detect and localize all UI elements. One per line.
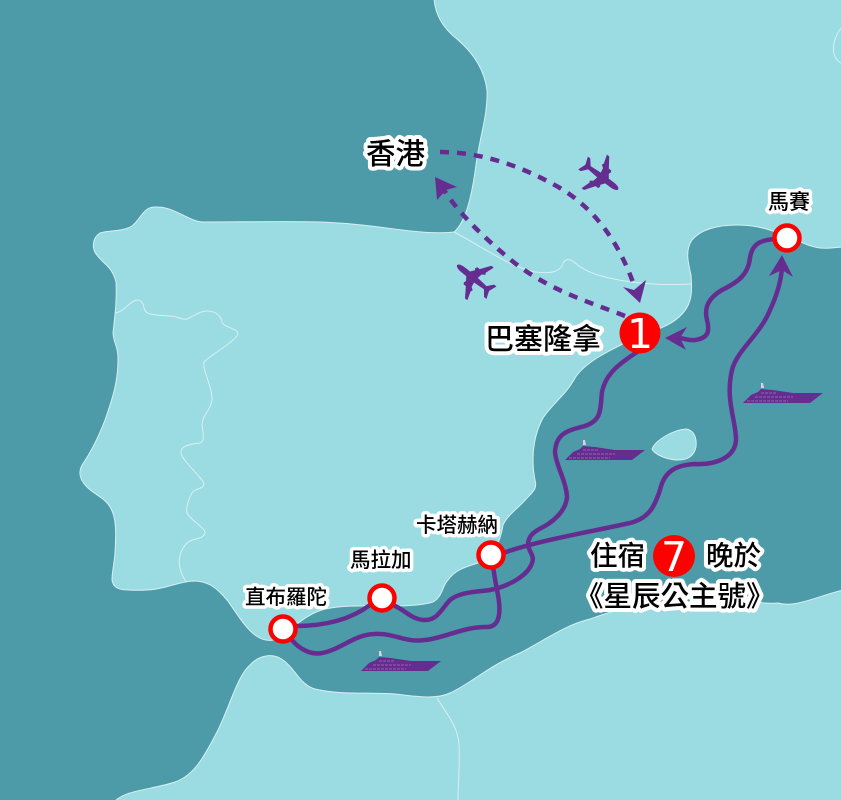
label: Hong Kong: 香港 xyxy=(366,138,426,171)
stop marker: Gibraltar xyxy=(270,616,296,642)
arrowhead: Barcelona arrival xyxy=(623,280,646,303)
border: Spain and France xyxy=(454,232,692,285)
land: North Africa xyxy=(114,590,841,800)
cruise route: Marseille to Barcelona xyxy=(678,239,775,340)
arrowhead: Hong Kong arrival xyxy=(435,177,457,200)
badge: 7 xyxy=(653,533,695,581)
flight path: Barcelona to Hong Kong xyxy=(435,177,625,316)
stop marker: Cartagena xyxy=(478,542,504,568)
icon: cruise ship south xyxy=(361,651,441,671)
label: Gibraltar: 直布羅陀 xyxy=(245,586,327,609)
arrowhead: Marseille arrival xyxy=(769,255,793,277)
label: Cartagena: 卡塔赫納 xyxy=(416,514,498,537)
border: Morocco and Algeria xyxy=(437,698,459,800)
callout text: ship name: 《星辰公主號》 xyxy=(575,581,775,613)
island: Mallorca xyxy=(652,429,696,460)
label: Malaga: 馬拉加 xyxy=(350,549,412,572)
icon: plane eastbound xyxy=(570,146,631,206)
cruise route: Malaga to Gibraltar xyxy=(295,605,370,626)
icon: cruise ship central xyxy=(565,440,645,460)
label: Marseille: 馬賽 xyxy=(768,191,810,214)
callout text: stay: 住宿 xyxy=(590,540,645,571)
badge: 7: 7 xyxy=(661,533,687,581)
badge: 1 xyxy=(620,310,660,358)
label: Barcelona: 巴塞隆拿 xyxy=(485,323,601,356)
icon: plane westbound xyxy=(444,249,505,309)
flight path: Hong Kong to Barcelona xyxy=(440,152,646,303)
arrowhead: Barcelona return xyxy=(665,327,687,350)
callout text: nights on: 晚於 xyxy=(706,540,761,571)
cruise route: Gibraltar to Cartagena xyxy=(292,565,499,653)
callout: seven nights aboard xyxy=(575,533,775,613)
stop marker: Marseille xyxy=(774,226,800,250)
land: Iberia and France xyxy=(80,0,841,640)
icon: cruise ship east xyxy=(743,383,823,403)
coastline: top right island xyxy=(833,28,841,63)
badge: 1: 1 xyxy=(627,310,653,358)
border: Spain and Portugal xyxy=(115,300,238,582)
cruise route: Cartagena to Marseille xyxy=(503,268,782,553)
cruise route: Barcelona to Malaga xyxy=(395,350,640,620)
stop marker: Malaga xyxy=(370,586,394,610)
